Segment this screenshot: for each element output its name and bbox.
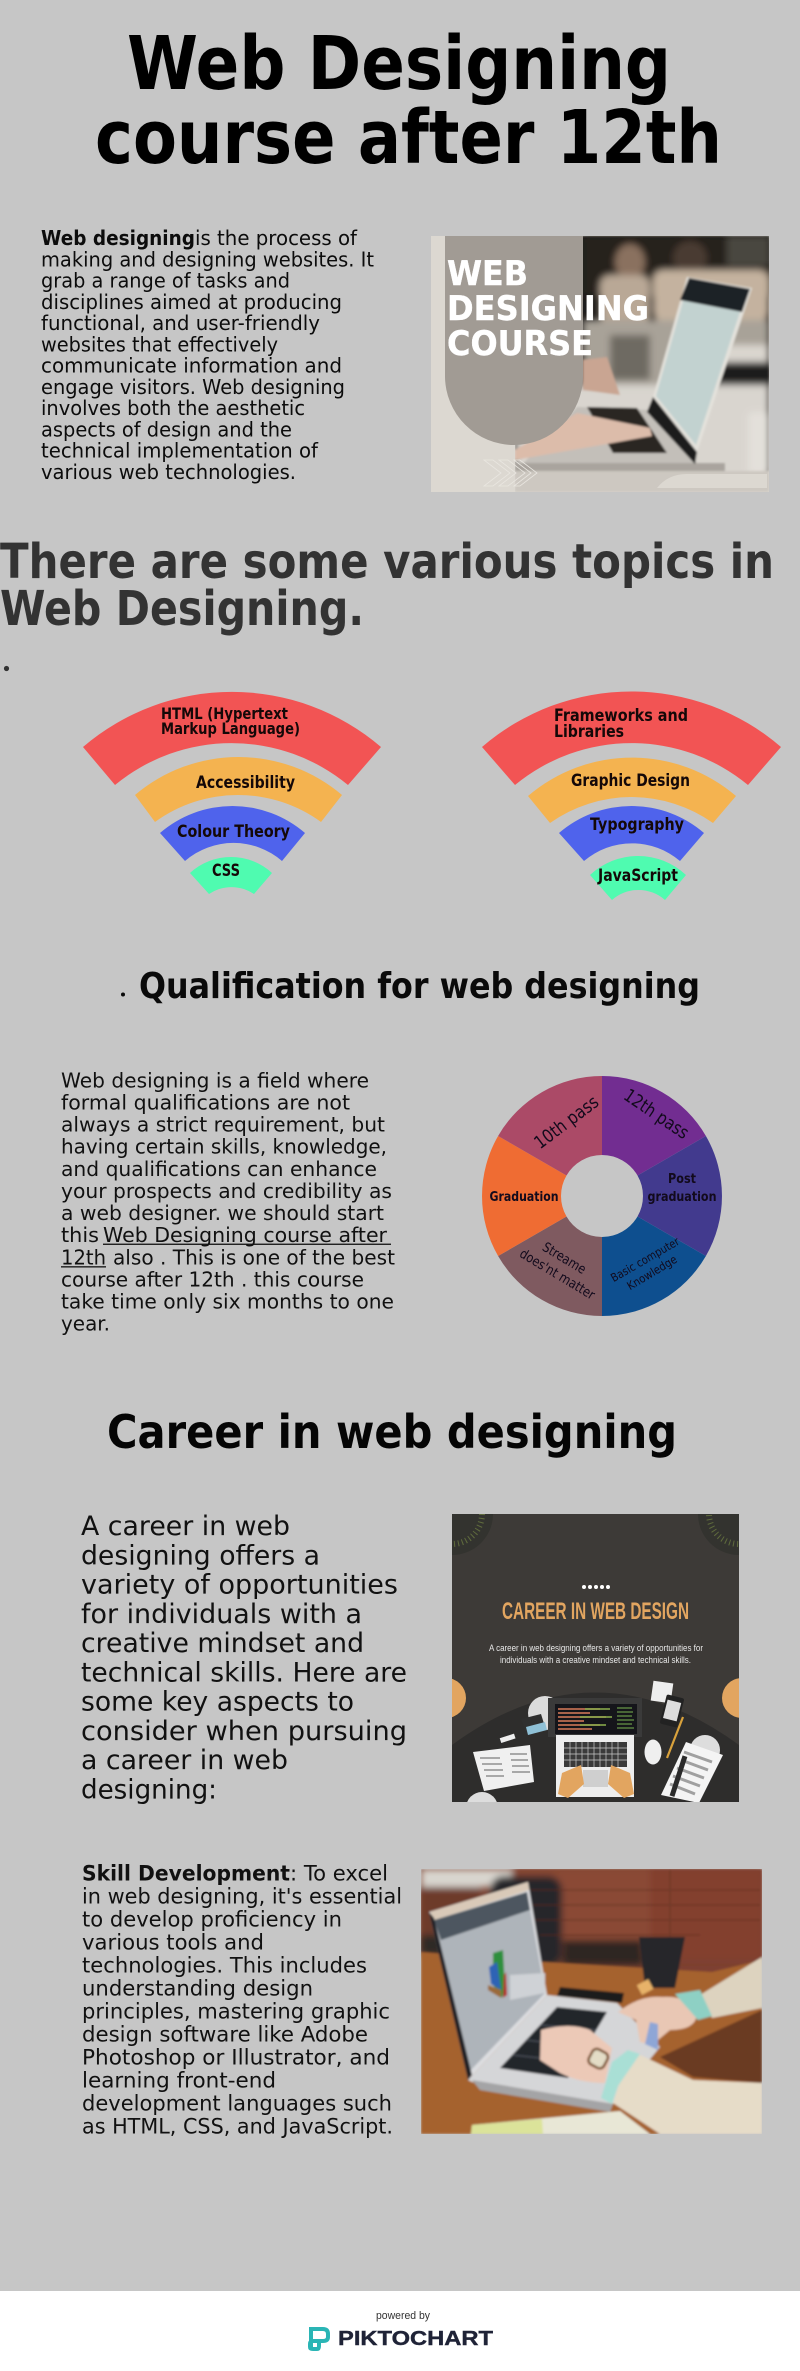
title: [95, 21, 722, 181]
arc labels: Typography: [590, 815, 684, 835]
text block: what is web designing: websites that effectively: [41, 332, 278, 356]
donut labels: Post: [668, 1171, 696, 1187]
heading: topics: Web Designing.: [0, 581, 364, 637]
text block: what is web designing: various web technologies.: [41, 460, 296, 484]
wooden table: [421, 1952, 762, 2134]
segment: 10th pass: [498, 1076, 602, 1176]
laptop screen: [429, 1882, 547, 2080]
text block: what is web designing: is the process of: [195, 226, 358, 250]
paper and watch: [661, 1742, 723, 1803]
arc labels: JavaScript: [597, 866, 678, 886]
text block: qualification: a web designer. we should start: [61, 1201, 384, 1225]
arc labels: Graphic Design: [571, 771, 690, 791]
image: laptop on desk photo: [421, 1869, 762, 2134]
segment: Post graduation: [638, 1136, 722, 1256]
logo on screen: [488, 1950, 507, 1998]
text block: skill development: in web designing, it's essential: [82, 1885, 402, 1910]
text block: skill development: development languages such: [82, 2091, 392, 2116]
watch: [587, 2047, 610, 2070]
chart: left wifi arcs: [83, 692, 381, 894]
text block: skill development: Skill Development: [82, 1862, 290, 1887]
text block: qualification: [61, 1068, 395, 1336]
text block: what is web designing: making and designing websites. It: [41, 247, 374, 271]
chevron arrows: [484, 460, 537, 486]
footer band: [0, 2291, 800, 2371]
segment: 12th pass: [602, 1076, 706, 1176]
image caption text: [447, 254, 649, 364]
heading: career: Career in web designing: [107, 1405, 677, 1459]
chart: right wifi arcs: [482, 691, 781, 900]
text block: qualification: your prospects and credibility as: [61, 1179, 392, 1203]
text block: what is web designing: functional, and user-friendly: [41, 311, 320, 335]
text block: qualification: 12th: [61, 1245, 106, 1269]
text block: career: designing:: [81, 1774, 217, 1806]
text block: qualification: always a strict requirement, but: [61, 1113, 385, 1137]
title: course after 12th: [95, 95, 722, 181]
pencil: [667, 1717, 683, 1758]
phone on desk: [557, 1987, 624, 2003]
text block: skill development: learning front-end: [82, 2068, 276, 2093]
keyboard: [500, 2007, 607, 2078]
cuffs: [601, 2050, 640, 2104]
image caption text: WEB: [447, 254, 528, 294]
arc: Typography: [559, 806, 704, 861]
footer powered by: powered by: [376, 2310, 430, 2322]
donut labels: Graduation: [490, 1189, 558, 1205]
mouse: [644, 1740, 662, 1764]
text block: career: for individuals with a: [81, 1599, 362, 1630]
text block: qualification: Web Designing course after: [103, 1223, 388, 1247]
poster subtitle: [489, 1644, 703, 1663]
text block: what is web designing: engage visitors. Web designing: [41, 375, 345, 399]
text block: what is web designing: communicate information and: [41, 354, 342, 378]
text block: what is web designing: disciplines aimed at producing: [41, 290, 342, 314]
donut labels: Knowledge: [624, 1252, 680, 1293]
donut labels: Streame: [539, 1239, 589, 1278]
desk: [452, 1692, 739, 1802]
arc labels: CSS: [212, 861, 240, 881]
segment: Graduation: [482, 1136, 566, 1256]
bullet dot: [4, 666, 9, 671]
donut labels: 12th pass: [620, 1085, 693, 1144]
text block: qualification: this: [61, 1223, 99, 1247]
arc: Colour Theory: [160, 806, 305, 861]
laptop base: [468, 1995, 660, 2104]
arc: Frameworks and Libraries: [482, 691, 781, 785]
segment: Streame does'nt matter: [498, 1216, 602, 1316]
text block: career: creative mindset and: [81, 1628, 364, 1659]
image: career in web design poster: [452, 1514, 739, 1802]
image: web designing course photo: [431, 236, 773, 492]
donut labels: 10th pass: [530, 1092, 603, 1154]
arc labels: Frameworks and: [554, 706, 688, 726]
mug: [639, 1937, 685, 1988]
text block: qualification: course after 12th . this course: [61, 1268, 364, 1292]
icon: piktochart logo: [310, 2329, 328, 2349]
arc: Graphic Design: [528, 758, 736, 823]
text block: qualification: and qualifications can enhance: [61, 1157, 377, 1181]
text block: what is web designing: grab a range of tasks and: [41, 269, 290, 293]
heading: qualification: Qualification for web designing: [139, 966, 700, 1007]
text block: qualification: also . This is one of the best: [113, 1245, 395, 1269]
donut labels: [490, 1085, 716, 1304]
text block: what is web designing: aspects of design and the: [41, 417, 292, 441]
poster subtitle: individuals with a creative mindset and technical skills.: [500, 1655, 691, 1665]
text block: skill development: [82, 1862, 402, 2139]
text block: what is web designing: Web designing: [41, 226, 195, 250]
text block: career: [81, 1511, 407, 1806]
arc labels: [554, 706, 690, 886]
book: [473, 1745, 534, 1791]
text block: what is web designing: involves both the aesthetic: [41, 396, 305, 420]
text block: qualification: year.: [61, 1312, 110, 1336]
donut labels: graduation: [648, 1189, 716, 1205]
text block: qualification: take time only six months to one: [61, 1290, 394, 1314]
text block: qualification: Web designing is a field where: [61, 1068, 369, 1092]
text block: career: consider when pursuing: [81, 1716, 407, 1747]
poster title: CAREER IN WEB DESIGN: [502, 1598, 689, 1625]
image caption text: DESIGNING: [447, 289, 649, 329]
arc: Accessibility: [135, 757, 342, 822]
poster subtitle: A career in web designing offers a variety of opportunities for: [489, 1643, 703, 1653]
right hand: [618, 1997, 697, 2045]
text block: skill development: various tools and: [82, 1931, 264, 1956]
note and phone: [651, 1681, 673, 1703]
arc labels: Markup Language): [161, 719, 300, 738]
laptop: [548, 1698, 642, 1737]
arc labels: Libraries: [554, 722, 624, 742]
text block: skill development: understanding design: [82, 1977, 313, 2002]
arc labels: [161, 704, 300, 881]
text block: qualification: formal qualifications are not: [61, 1090, 350, 1114]
orange half circles: [452, 1678, 739, 1718]
text block: skill development: : To excel: [290, 1862, 388, 1887]
footer brand name: PIKTOCHART: [338, 2328, 493, 2350]
text block: skill development: technologies. This includes: [82, 1954, 367, 1979]
five dots: [582, 1585, 610, 1589]
left hand: [540, 2026, 612, 2083]
hands: [558, 1765, 634, 1798]
text block: career: technical skills. Here are: [81, 1657, 407, 1688]
cds: [467, 1792, 497, 1802]
text block: skill development: to develop proficiency in: [82, 1908, 342, 1933]
arc labels: Accessibility: [196, 773, 295, 793]
donut labels: Basic computer: [608, 1234, 682, 1285]
text block: career: A career in web: [81, 1511, 290, 1542]
text block: what is web designing: technical implementation of: [41, 439, 319, 463]
text block: qualification: having certain skills, knowledge,: [61, 1135, 387, 1159]
arc: HTML: [83, 692, 381, 785]
grey arch shape: [445, 236, 583, 445]
text block: career: some key aspects to: [81, 1687, 354, 1718]
segment: Basic computer knowledge: [602, 1216, 706, 1316]
text block: career: variety of opportunities: [81, 1570, 398, 1601]
arc: CSS: [190, 857, 272, 894]
title: Web Designing: [127, 21, 671, 107]
brick lines: [531, 1872, 758, 1937]
text block: career: designing offers a: [81, 1540, 320, 1571]
arc: JavaScript: [590, 856, 686, 900]
image caption text: COURSE: [447, 324, 593, 364]
text block: skill development: as HTML, CSS, and JavaScript.: [82, 2114, 393, 2139]
text block: skill development: principles, mastering graphic: [82, 2000, 390, 2024]
paper: [471, 2111, 650, 2134]
text block: career: a career in web: [81, 1745, 288, 1776]
text block: what is web designing: [41, 226, 374, 484]
text block: skill development: design software like Adobe: [82, 2022, 368, 2048]
chart: qualification donut: [482, 1076, 722, 1316]
text block: skill development: Photoshop or Illustrator, and: [82, 2046, 390, 2070]
sleeves: [613, 2050, 762, 2134]
arc labels: Colour Theory: [177, 822, 290, 842]
arc labels: HTML (Hypertext: [161, 704, 288, 723]
heading: topics: [0, 534, 774, 637]
desk items: [528, 1696, 553, 1730]
donut labels: does'nt matter: [517, 1246, 598, 1304]
